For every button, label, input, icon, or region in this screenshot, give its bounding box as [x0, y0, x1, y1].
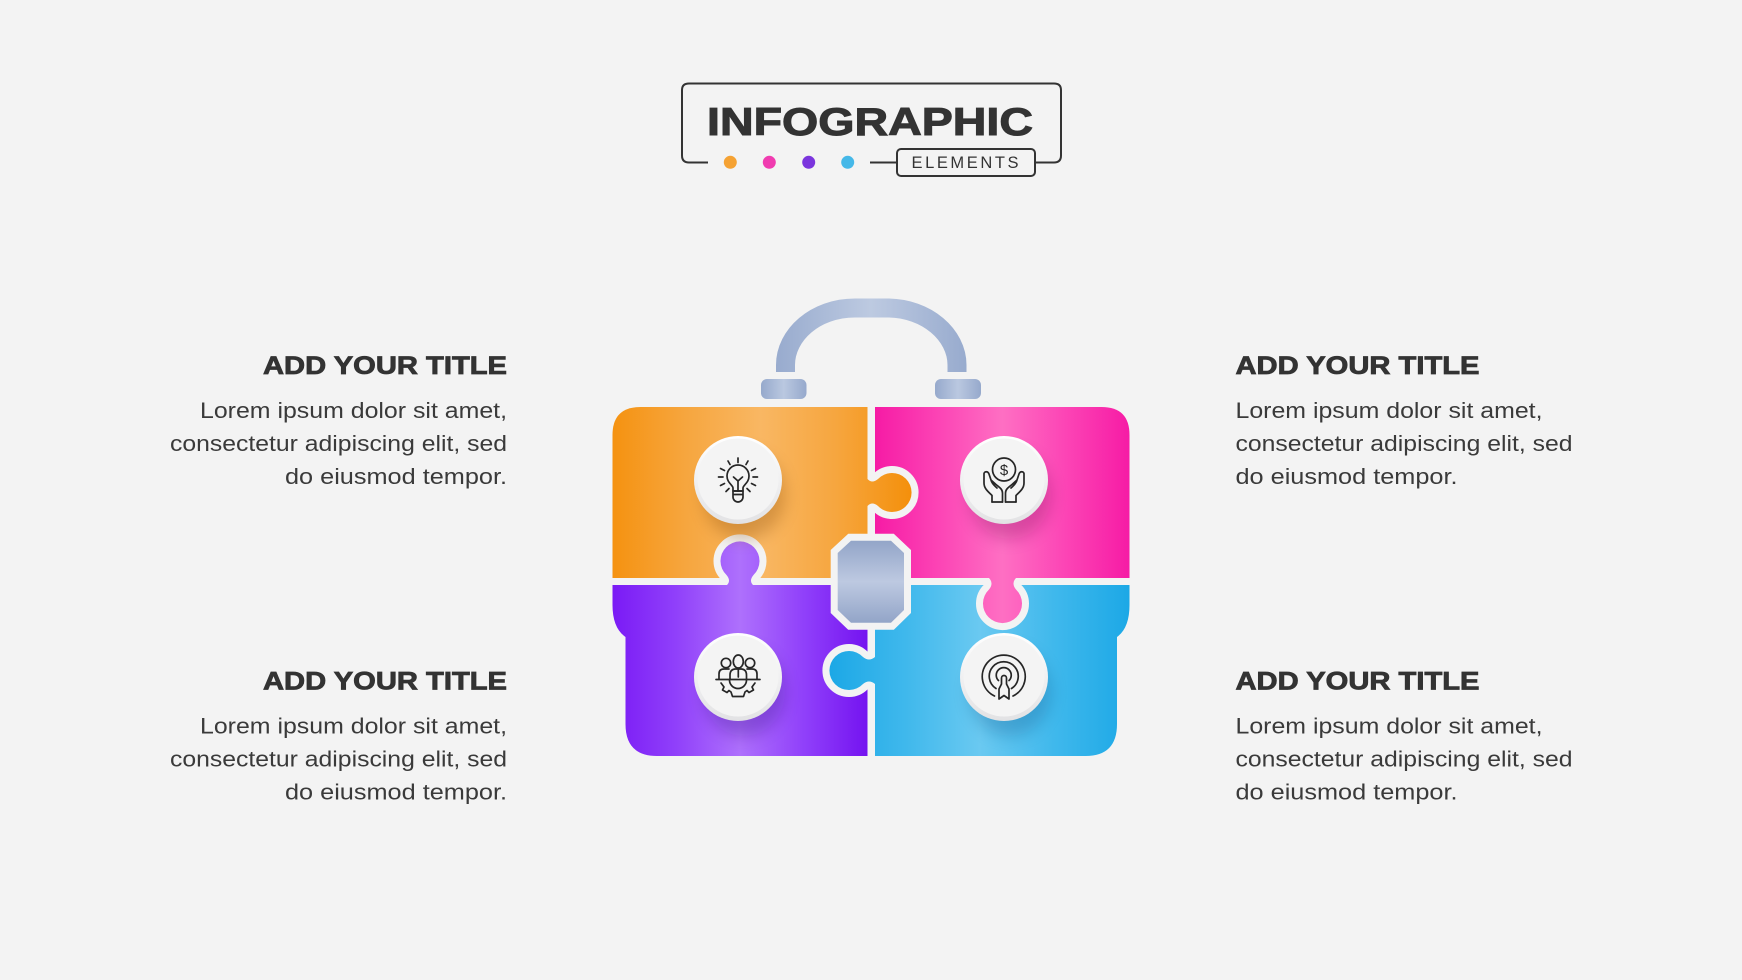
puzzle piece: pink [875, 407, 1130, 578]
badge outline [682, 84, 1061, 162]
puzzle piece: orange [612, 407, 868, 578]
icon: money in hands [984, 458, 1024, 502]
blue puzzle tab [829, 651, 875, 690]
body text: consectetur adipiscing elit, sed [1236, 746, 1572, 772]
icon button: money in hands [960, 436, 1051, 539]
body text [1236, 398, 1572, 489]
body text: Lorem ipsum dolor sit amet, [200, 398, 507, 423]
body text: Lorem ipsum dolor sit amet, [1236, 398, 1542, 423]
text block: bottom right [1236, 668, 1572, 804]
icon: light bulb [718, 458, 758, 502]
body text: do eiusmod tempor. [285, 780, 507, 804]
elements label box [897, 149, 1035, 176]
dollar sign: $ [1000, 462, 1009, 479]
body text: consectetur adipiscing elit, sed [1236, 431, 1572, 456]
handle foot left [761, 379, 806, 399]
puzzle piece: blue [875, 585, 1130, 756]
heading: ADD YOUR TITLE [1236, 668, 1480, 696]
briefcase handle [786, 308, 957, 372]
icon button: target ribbon [960, 633, 1051, 736]
handle foot right [935, 379, 981, 399]
orange puzzle tab [868, 473, 912, 512]
infographic canvas [171, 82, 1571, 804]
body text: do eiusmod tempor. [1236, 780, 1458, 804]
pink puzzle tab [983, 578, 1022, 623]
centre clasp [838, 541, 904, 623]
purple puzzle tab [721, 541, 760, 586]
briefcase puzzle diagram [612, 308, 1130, 756]
elements label: ELEMENTS [912, 154, 1018, 172]
title text: INFOGRAPHIC [707, 101, 1033, 144]
heading: ADD YOUR TITLE [263, 668, 507, 696]
icon: team and gear [716, 655, 760, 696]
puzzle piece: purple [612, 585, 868, 756]
icon: target ribbon [982, 655, 1025, 699]
text block: bottom left [170, 668, 507, 804]
body text: do eiusmod tempor. [1236, 464, 1458, 489]
icon button: team and gear [694, 633, 785, 736]
body text: consectetur adipiscing elit, sed [170, 746, 507, 772]
body text: Lorem ipsum dolor sit amet, [1236, 714, 1542, 738]
text block: top right [1236, 352, 1572, 489]
heading: ADD YOUR TITLE [1236, 352, 1480, 380]
body text [1236, 714, 1572, 804]
body text: do eiusmod tempor. [285, 464, 507, 489]
text block: top left [170, 352, 507, 489]
body text [170, 714, 507, 804]
title badge [682, 84, 1061, 176]
body text: Lorem ipsum dolor sit amet, [200, 714, 507, 738]
icon button: light bulb [694, 436, 785, 539]
body text: consectetur adipiscing elit, sed [170, 431, 507, 456]
heading: ADD YOUR TITLE [263, 352, 507, 380]
decorative coloured dots [724, 156, 854, 169]
body text [170, 398, 507, 489]
